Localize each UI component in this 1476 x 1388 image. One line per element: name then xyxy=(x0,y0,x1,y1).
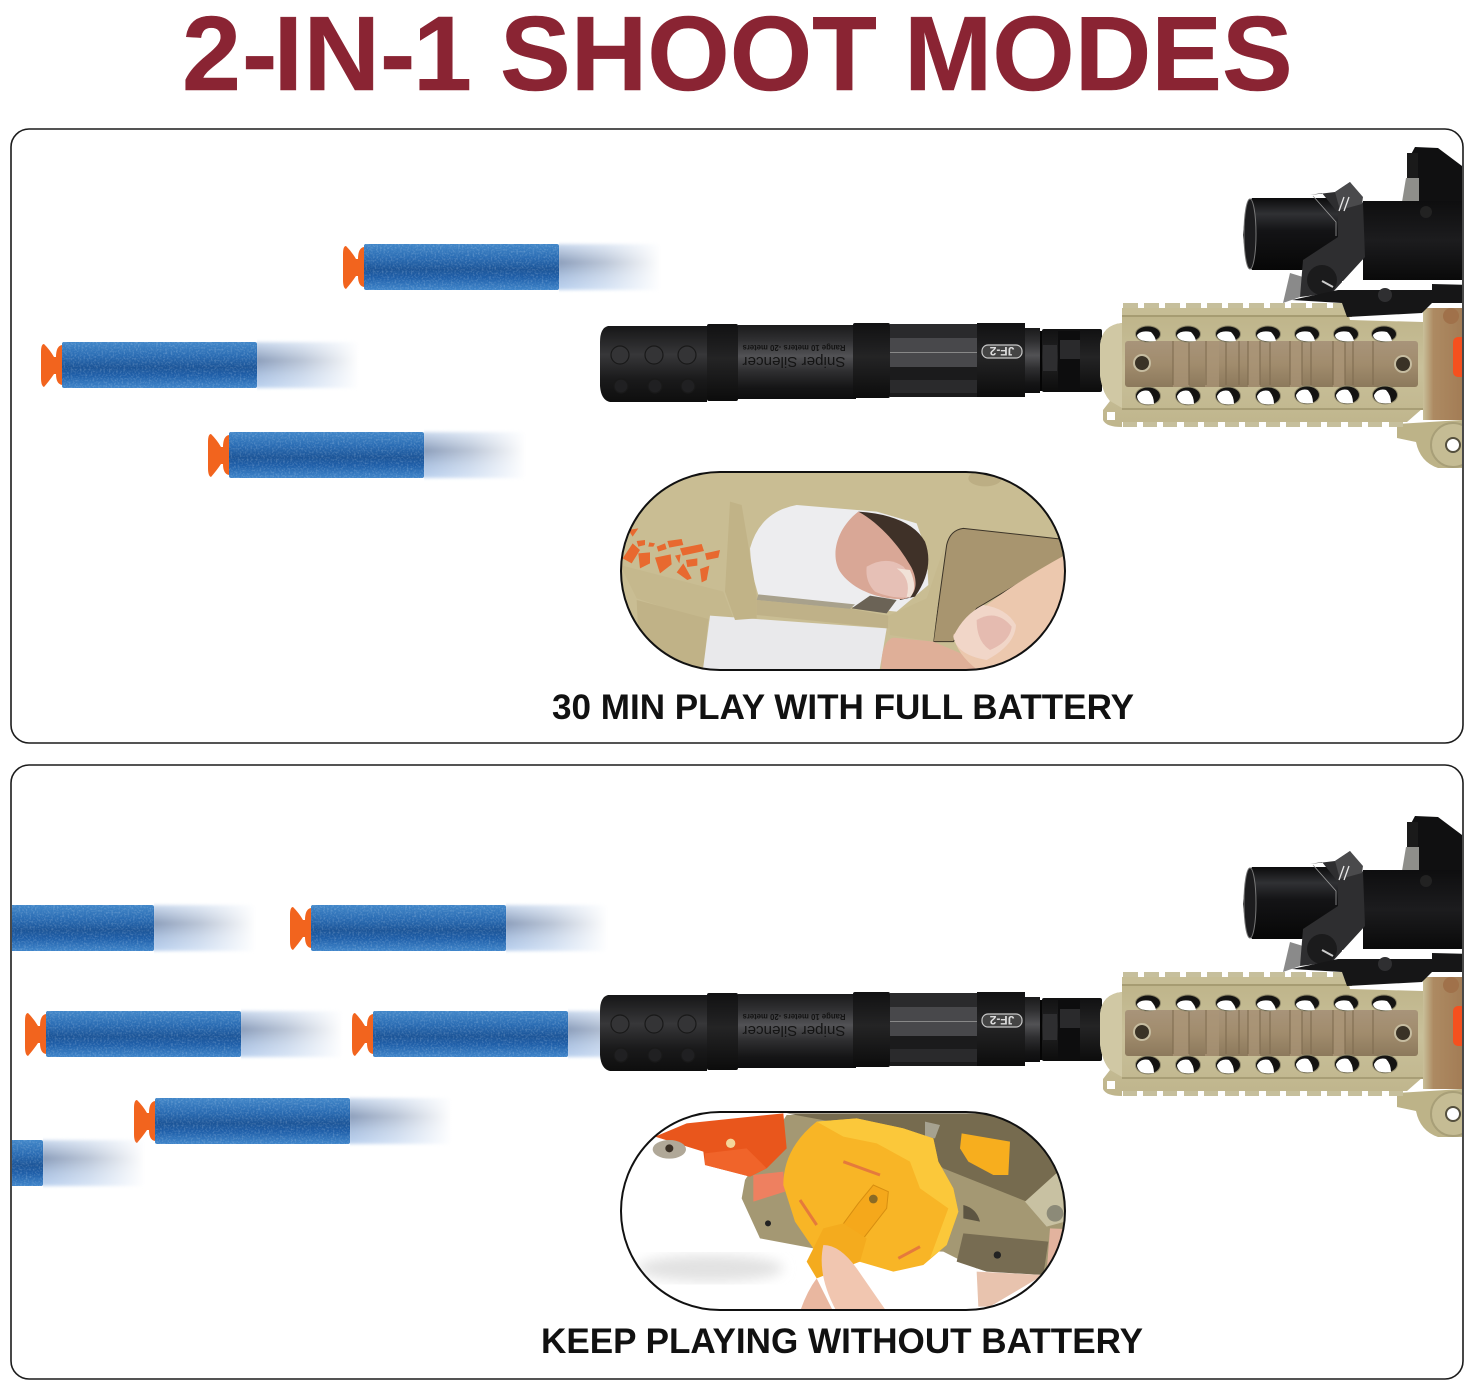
caption: electric mode: 30 MIN PLAY WITH FULL BATTERY xyxy=(552,688,1134,727)
inset: turning the hand crank xyxy=(620,1111,1066,1311)
title xyxy=(182,0,1293,113)
flying darts xyxy=(0,905,670,1186)
panel frame xyxy=(11,765,1463,1379)
flying dart xyxy=(343,244,661,290)
flying dart xyxy=(208,432,526,478)
panel: electric shooting mode xyxy=(11,129,1475,743)
blaster with silencer xyxy=(600,147,1475,468)
inset: finger pulling trigger xyxy=(620,471,1066,671)
caption: manual mode: KEEP PLAYING WITHOUT BATTERY xyxy=(541,1322,1143,1361)
flying dart xyxy=(41,342,359,388)
panel frame xyxy=(11,129,1463,743)
blaster with silencer xyxy=(600,816,1475,1137)
panel: manual shooting mode xyxy=(0,765,1475,1379)
